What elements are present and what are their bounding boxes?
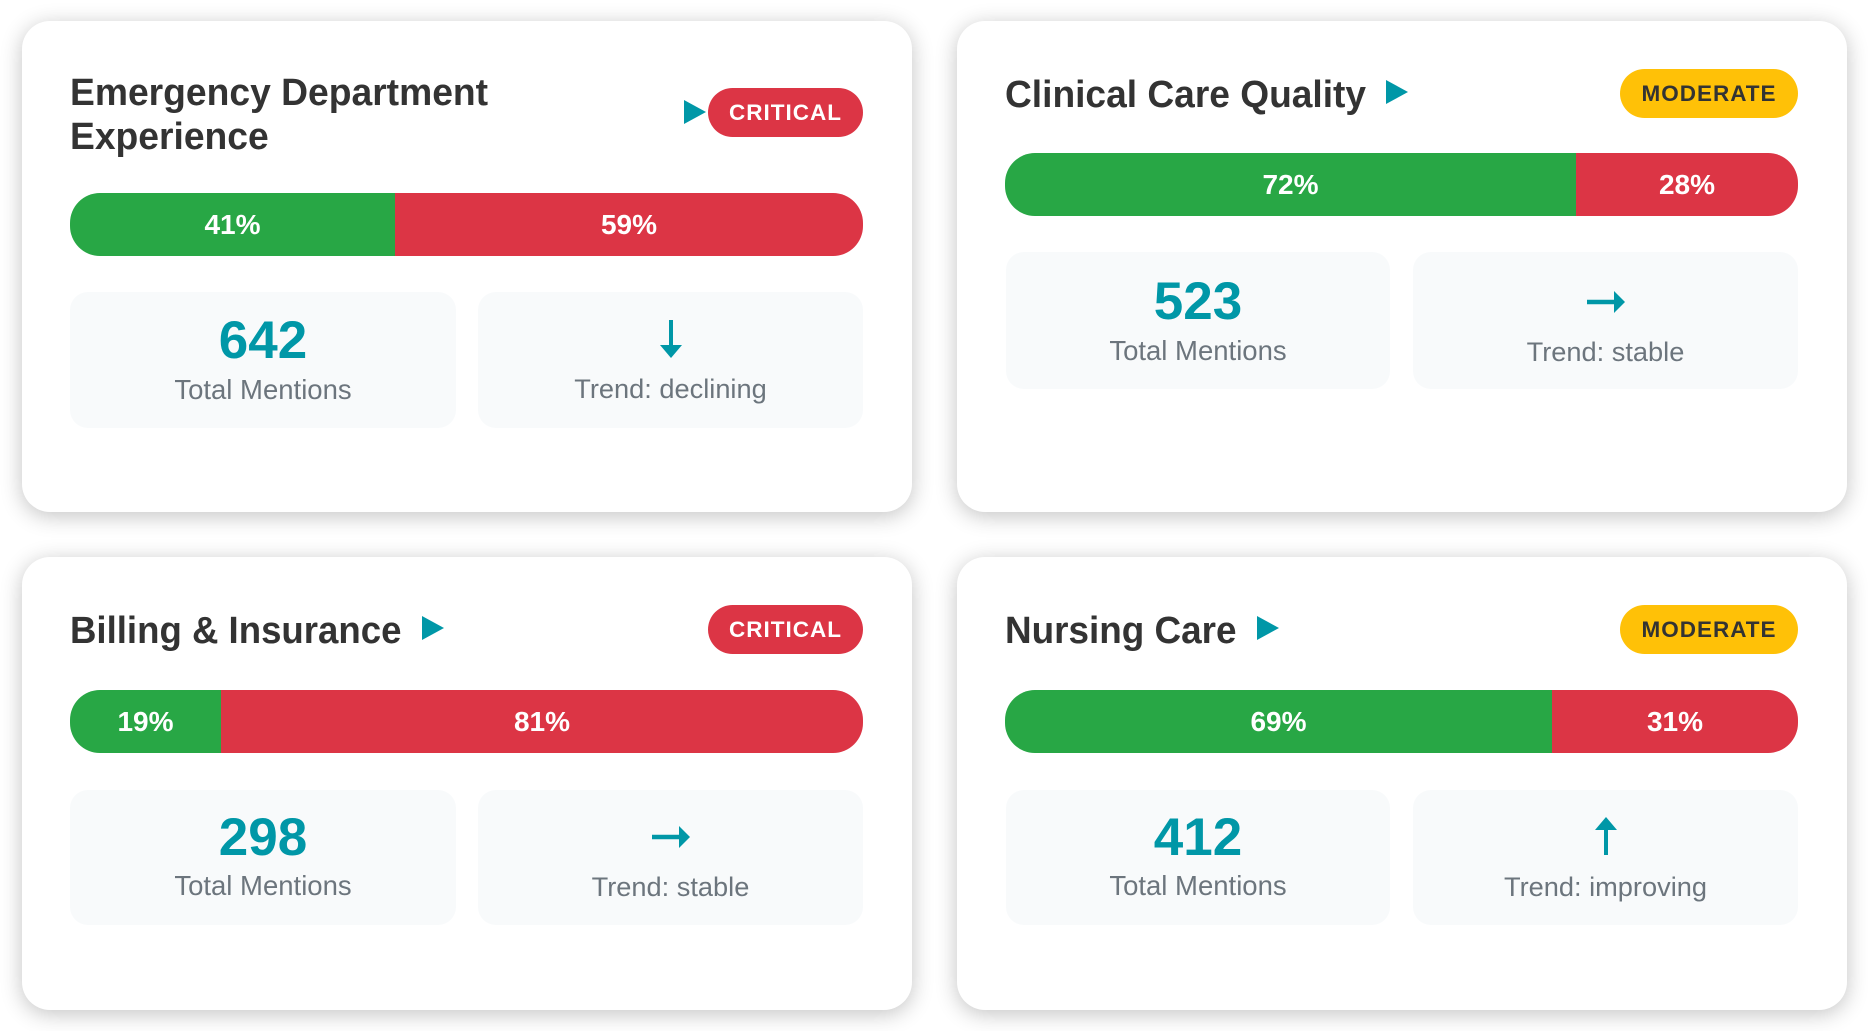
- stat: total mentions: [70, 790, 456, 925]
- label: Total Mentions: [174, 374, 352, 405]
- label: Trend: declining: [574, 373, 767, 404]
- panel: Nursing Care: [957, 557, 1847, 1010]
- stat: trend: [478, 292, 863, 428]
- icon: down arrow: [660, 320, 682, 358]
- positive share: 72%: [1262, 169, 1319, 200]
- panel: Emergency Department Experience: [22, 21, 912, 512]
- stat: total mentions: [1006, 252, 1390, 389]
- label: Total Mentions: [1109, 335, 1287, 366]
- icon: right arrow: [1587, 291, 1625, 313]
- badge: moderate: [1620, 69, 1798, 118]
- label: Trend: improving: [1504, 871, 1707, 902]
- panel: Clinical Care Quality: [957, 21, 1847, 512]
- panel: Billing & Insurance: [22, 557, 912, 1010]
- number: 642: [219, 311, 307, 370]
- stat: trend: [478, 790, 863, 925]
- heading: Clinical Care Quality: [1005, 74, 1366, 116]
- heading: Experience: [70, 116, 269, 158]
- negative share: [395, 193, 863, 256]
- negative share: [221, 690, 863, 753]
- icon: teal triangle: [422, 616, 444, 640]
- icon: teal triangle: [1257, 616, 1279, 640]
- badge: critical: CRITICAL: [729, 617, 842, 642]
- badge: critical: CRITICAL: [729, 100, 842, 125]
- heading: Billing & Insurance: [70, 610, 401, 652]
- stat: total mentions: [1006, 790, 1390, 925]
- negative share: 28%: [1659, 169, 1715, 200]
- heading: [70, 72, 488, 158]
- positive share: 69%: [1250, 706, 1307, 737]
- negative share: 81%: [514, 706, 570, 737]
- positive share: [1005, 690, 1552, 753]
- label: Trend: stable: [592, 871, 749, 902]
- badge: moderate: MODERATE: [1641, 617, 1777, 642]
- label: Total Mentions: [1109, 870, 1287, 901]
- number: 412: [1154, 808, 1242, 867]
- icon: up arrow: [1595, 817, 1617, 855]
- positive share: [1005, 153, 1576, 216]
- heading: Emergency Department: [70, 72, 488, 114]
- sentiment bar: [1005, 690, 1798, 753]
- icon: teal triangle: [1386, 80, 1408, 104]
- negative share: 31%: [1647, 706, 1703, 737]
- badge: critical: [708, 88, 863, 137]
- negative share: 59%: [601, 209, 657, 240]
- sentiment bar: [70, 193, 863, 256]
- positive share: 41%: [204, 209, 261, 240]
- label: Total Mentions: [174, 870, 352, 901]
- positive share: 19%: [117, 706, 174, 737]
- stat: trend: [1413, 790, 1798, 925]
- icon: right arrow: [652, 826, 690, 848]
- number: 523: [1154, 272, 1242, 331]
- positive share: [70, 690, 221, 753]
- sentiment bar: [70, 690, 863, 753]
- badge: moderate: [1620, 605, 1798, 654]
- stat: total mentions: [70, 292, 456, 428]
- label: Trend: stable: [1527, 336, 1684, 367]
- heading: Nursing Care: [1005, 610, 1236, 652]
- icon: teal triangle: [684, 100, 706, 124]
- negative share: [1552, 690, 1798, 753]
- number: 298: [219, 808, 307, 867]
- positive share: [70, 193, 395, 256]
- badge: critical: [708, 605, 863, 654]
- negative share: [1576, 153, 1798, 216]
- sentiment bar: [1005, 153, 1798, 216]
- badge: moderate: MODERATE: [1641, 81, 1777, 106]
- stat: trend: [1413, 252, 1798, 389]
